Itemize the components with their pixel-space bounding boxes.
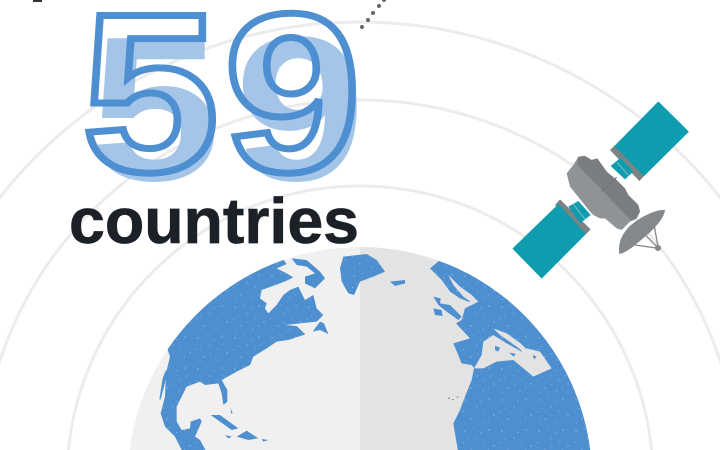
satellite: upper solar panel bbox=[610, 102, 688, 181]
big number 59: 59 bbox=[90, 0, 365, 224]
heading: countries: countries bbox=[69, 185, 359, 257]
map: americas bbox=[159, 255, 328, 450]
top-left text fragment bbox=[33, 0, 42, 2]
satellite bbox=[513, 102, 688, 278]
satellite: connectors bbox=[568, 158, 633, 223]
satellite: body bbox=[567, 156, 640, 230]
satellite: dish bbox=[619, 210, 665, 254]
map: europe, africa and greenland bbox=[340, 254, 607, 450]
satellite: lower solar panel bbox=[513, 199, 591, 278]
dotted line bbox=[360, 0, 386, 29]
globe bbox=[128, 240, 607, 450]
